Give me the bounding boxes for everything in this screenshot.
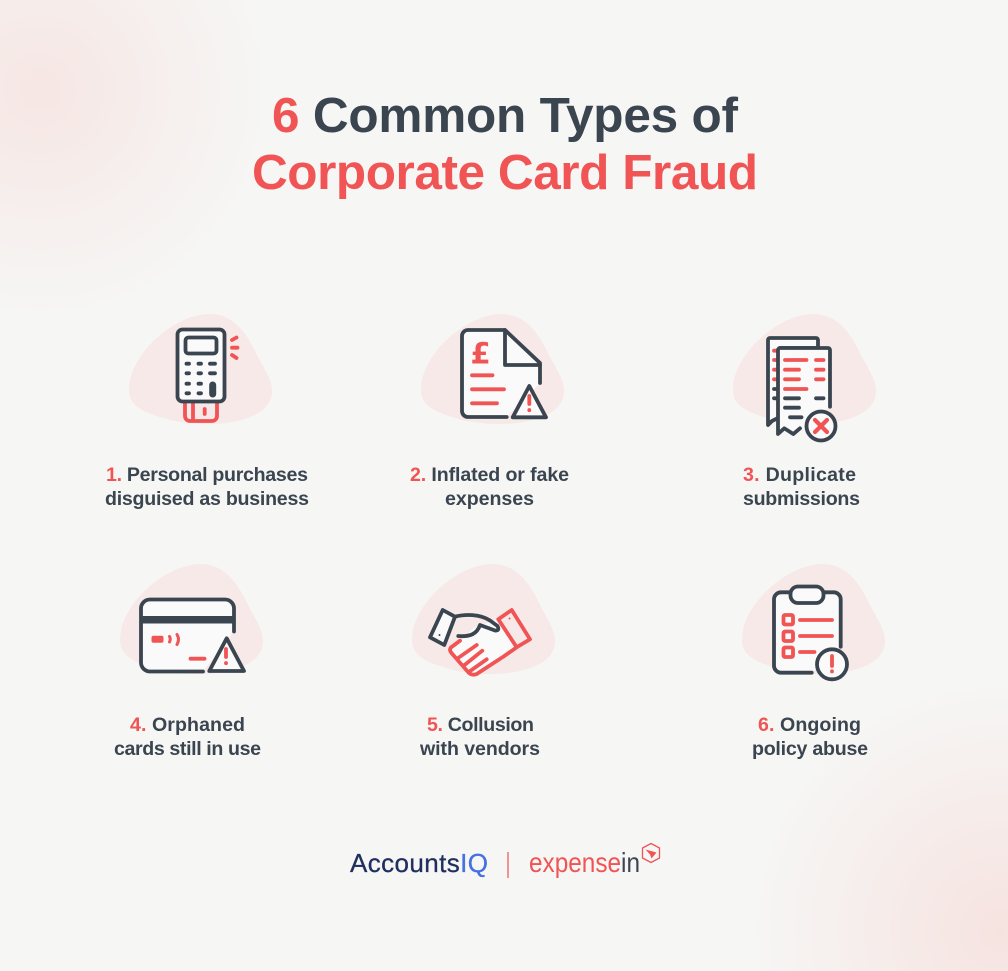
label 2 second line: expenses [445, 488, 534, 510]
label 4 second line: cards still in use [114, 738, 261, 760]
icon: clipboard with alert [774, 586, 847, 679]
title: Corporate Card Fraud [252, 145, 758, 200]
label 6 second line: policy abuse [752, 738, 868, 760]
background blob 6 [742, 564, 885, 674]
label 5 second line: with vendors [419, 738, 540, 760]
label 3 second line: submissions [743, 488, 860, 510]
label 6: 6. Ongoing [758, 714, 861, 736]
background blob 4 [120, 564, 263, 674]
background blob 2 [421, 314, 564, 424]
label 4: 4. Orphaned [130, 714, 245, 736]
icon: duplicate receipts [768, 338, 836, 440]
panel: orphaned cards [114, 564, 263, 760]
label 3: 3. Duplicate [743, 464, 856, 486]
panel: personal purchases [105, 314, 309, 510]
icon: handshake [430, 610, 530, 675]
panel: inflated or fake expenses [410, 314, 569, 510]
icon: credit card with warning [141, 600, 244, 672]
label 2: 2. Inflated or fake [410, 464, 569, 486]
panel: duplicate submissions [733, 314, 876, 510]
background blob 5 [412, 564, 555, 674]
background blob 1 [129, 314, 272, 424]
background blob 3 [733, 314, 876, 424]
panel: collusion with vendors [412, 564, 555, 760]
panel: ongoing policy abuse [742, 564, 885, 760]
logo: expensein: expensein [529, 847, 640, 878]
logo: AccountsIQ: AccountsIQ [350, 848, 488, 878]
icon: invoice with warning: £ [470, 336, 491, 370]
icon: invoice with warning [462, 330, 546, 417]
label 1: 1. Personal purchases [106, 464, 308, 486]
title: 6 Common Types of [272, 88, 739, 143]
label 5: 5. Collusion [427, 714, 534, 736]
icon: card terminal [178, 330, 238, 421]
label 1 second line: disguised as business [105, 488, 309, 510]
title [252, 88, 758, 200]
